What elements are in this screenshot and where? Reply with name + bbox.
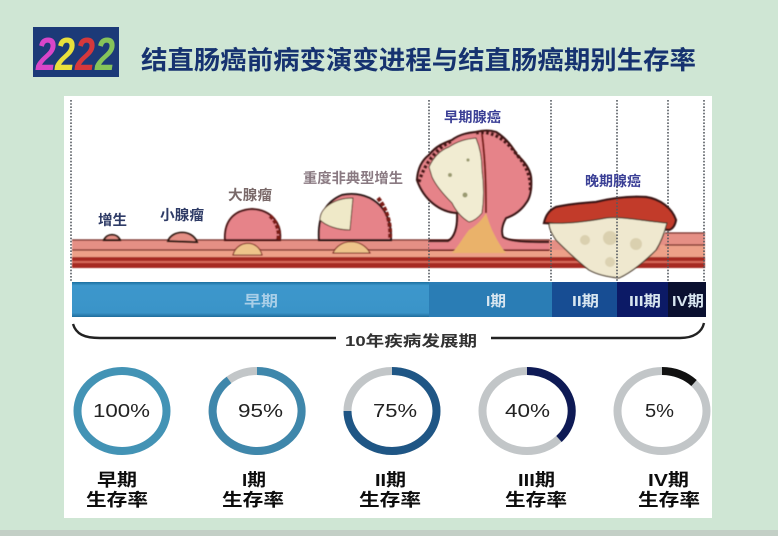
survival labels: 生存率 — [222, 490, 284, 510]
lesions — [104, 130, 676, 278]
logo badge: 2 — [74, 28, 95, 80]
donut: III 40%: 40% — [505, 401, 550, 421]
lesion labels: 大腺瘤 — [228, 187, 272, 203]
survival labels: 早期 — [97, 470, 137, 490]
stage bar: I期 — [486, 293, 506, 310]
donut: II 75% — [348, 371, 436, 451]
survival labels — [86, 470, 700, 510]
stage bar: IV期 — [672, 293, 704, 310]
stage bar: 早期 — [244, 293, 278, 310]
survival labels: IV期 — [648, 470, 689, 490]
10-year bracket: 10年疾病发展期 — [345, 332, 477, 350]
stage bar: III期 — [629, 293, 661, 310]
logo badge — [33, 27, 119, 80]
donut: IV 5%: 5% — [645, 401, 674, 421]
lesion: large adenoma — [225, 209, 280, 255]
survival labels: 生存率 — [638, 490, 700, 510]
donut: III 40% — [482, 371, 572, 451]
donut: I 95%: 95% — [238, 401, 283, 421]
stage boundary dotted lines — [71, 100, 704, 282]
lesion: severe atypical hyperplasia — [319, 194, 391, 253]
10-year bracket — [73, 323, 704, 350]
lesion labels: 早期腺癌 — [444, 109, 501, 125]
lesion labels: 小腺瘤 — [160, 207, 204, 223]
survival labels: 生存率 — [505, 490, 567, 510]
survival labels: II期 — [375, 470, 406, 490]
lesion: hyperplasia — [104, 235, 120, 240]
donut: II 75%: 75% — [373, 401, 417, 421]
stage bar: II期 — [572, 293, 599, 310]
lesion labels: 晚期腺癌 — [585, 173, 641, 189]
lesion labels: 增生 — [98, 212, 127, 228]
survival labels: 生存率 — [86, 490, 148, 510]
title: 结直肠癌前病变演变进程与结直肠癌期别生存率 — [141, 46, 696, 75]
logo badge: 2 — [35, 28, 56, 80]
donut: early 100% — [78, 371, 166, 451]
survival labels: III期 — [518, 470, 555, 490]
lesion: late cancer — [544, 197, 676, 278]
lesion: small adenoma — [168, 232, 197, 242]
stage bar — [72, 282, 706, 317]
donut: IV 5% — [618, 371, 706, 451]
white panel — [64, 96, 712, 518]
lesion: early cancer — [417, 130, 549, 253]
colon wall layers — [72, 233, 705, 268]
survival labels: I期 — [242, 470, 266, 490]
lesion labels: 重度非典型增生 — [303, 170, 403, 186]
lesion labels — [98, 109, 641, 228]
donut: early 100%: 100% — [93, 401, 150, 421]
donut: I 95% — [212, 371, 302, 451]
stage III boundary dotted line — [616, 100, 618, 282]
bottom grey band — [0, 530, 778, 536]
logo badge: 2 — [94, 28, 115, 80]
logo badge: 2 — [54, 28, 75, 80]
survival labels: 生存率 — [359, 490, 421, 510]
